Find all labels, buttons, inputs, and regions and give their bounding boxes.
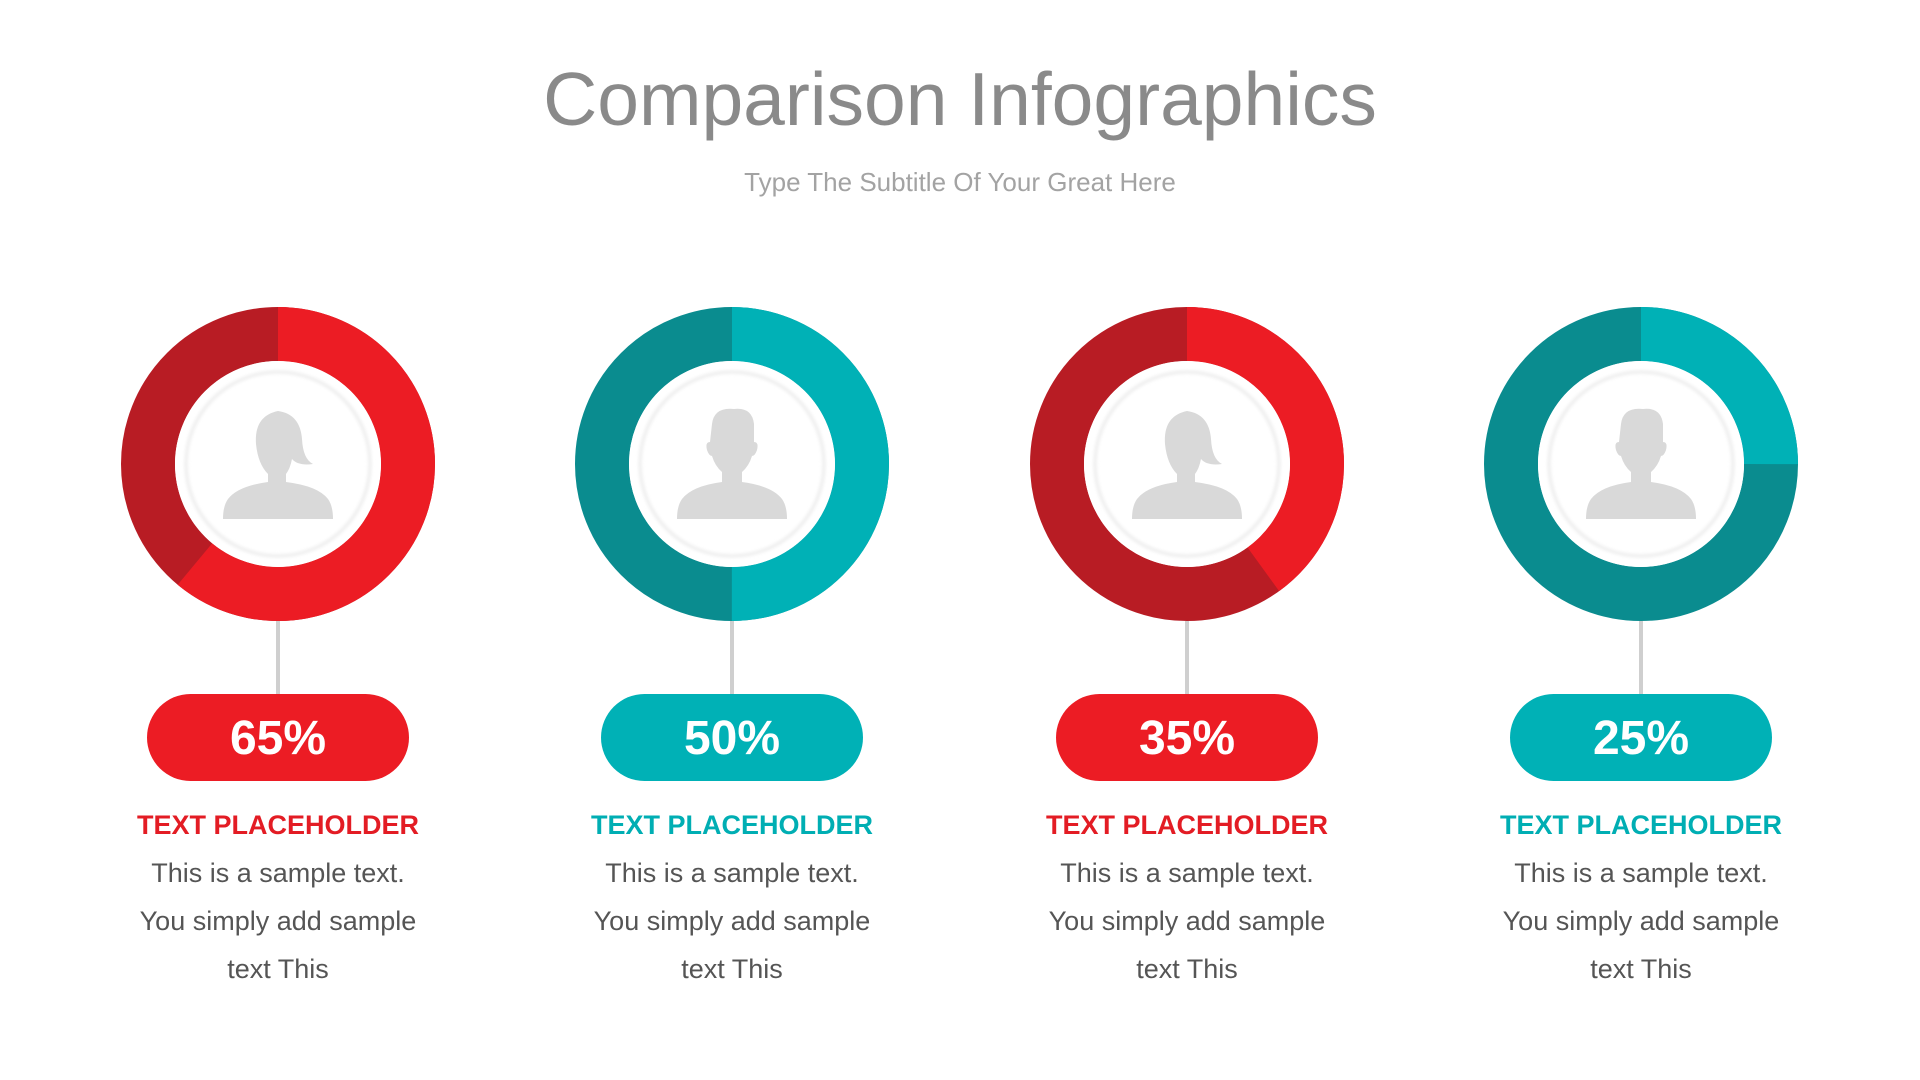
text block: You simply add sample bbox=[1049, 906, 1325, 936]
heading: TEXT PLACEHOLDER bbox=[137, 810, 419, 840]
donut chart 25% bbox=[1511, 334, 1771, 594]
connector line bbox=[276, 621, 280, 695]
icon: female person bbox=[223, 411, 333, 519]
text block: text This bbox=[1590, 954, 1692, 984]
title: Comparison Infographics bbox=[543, 57, 1377, 141]
text block: You simply add sample bbox=[594, 906, 870, 936]
donut chart 50% bbox=[602, 334, 862, 594]
icon: male person bbox=[1586, 409, 1696, 519]
text block: This is a sample text. bbox=[1514, 858, 1768, 888]
panel: item 4 bbox=[1500, 334, 1782, 984]
text block: text This bbox=[1136, 954, 1238, 984]
icon: female person bbox=[1132, 411, 1242, 519]
text block: This is a sample text. bbox=[605, 858, 859, 888]
subtitle: Type The Subtitle Of Your Great Here bbox=[744, 167, 1176, 197]
donut chart 35% bbox=[1057, 334, 1317, 594]
pill: 35% bbox=[1056, 694, 1318, 781]
pill: 65%: 65% bbox=[230, 712, 326, 765]
pill: 50%: 50% bbox=[684, 712, 780, 765]
connector line bbox=[1185, 621, 1189, 695]
pill: 65% bbox=[147, 694, 409, 781]
text block: text This bbox=[227, 954, 329, 984]
connector line bbox=[730, 621, 734, 695]
pill: 50% bbox=[601, 694, 863, 781]
pill: 25% bbox=[1510, 694, 1772, 781]
heading: TEXT PLACEHOLDER bbox=[591, 810, 873, 840]
pill: 25%: 25% bbox=[1593, 712, 1689, 765]
connector line bbox=[1639, 621, 1643, 695]
text block: You simply add sample bbox=[1503, 906, 1779, 936]
pill: 35%: 35% bbox=[1139, 712, 1235, 765]
heading: TEXT PLACEHOLDER bbox=[1046, 810, 1328, 840]
panel: item 1 bbox=[137, 334, 419, 984]
icon: male person bbox=[677, 409, 787, 519]
donut chart 65% bbox=[148, 334, 408, 594]
text block: text This bbox=[681, 954, 783, 984]
panel: item 2 bbox=[591, 334, 873, 984]
panel: item 3 bbox=[1046, 334, 1328, 984]
text block: You simply add sample bbox=[140, 906, 416, 936]
heading: TEXT PLACEHOLDER bbox=[1500, 810, 1782, 840]
text block: This is a sample text. bbox=[151, 858, 405, 888]
text block: This is a sample text. bbox=[1060, 858, 1314, 888]
